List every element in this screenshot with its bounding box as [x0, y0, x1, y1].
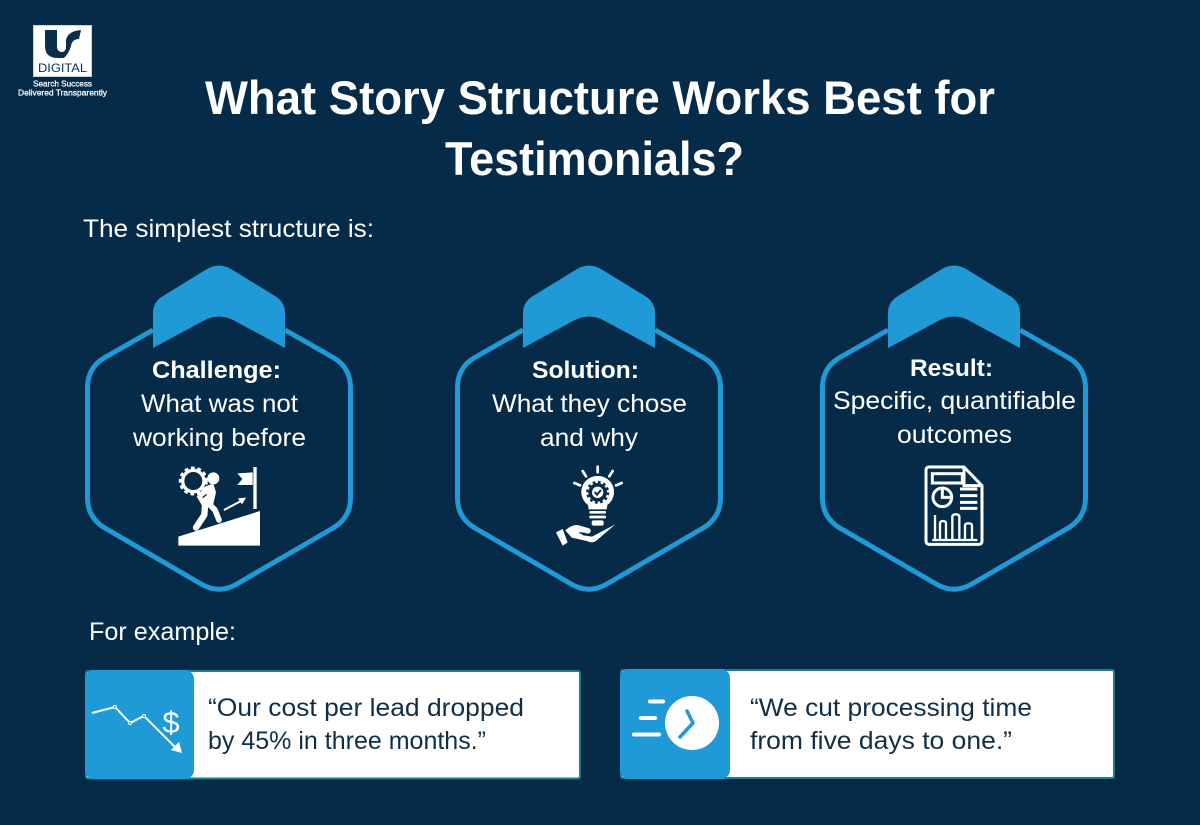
callout: cost per lead — [85, 670, 580, 779]
icon: report document — [926, 467, 982, 544]
example label: For example: — [89, 618, 236, 646]
quote: from five days to one.” — [750, 727, 1012, 755]
callout: processing time — [620, 669, 1114, 779]
title: What Story Structure Works Best for — [205, 71, 995, 124]
logo: DIGITAL — [38, 63, 88, 75]
description: What was not — [141, 390, 298, 418]
banner — [888, 266, 1020, 348]
icon: fast clock — [620, 669, 730, 779]
description: and why — [540, 424, 639, 452]
description: working before — [132, 424, 306, 452]
quote: “We cut processing time — [750, 694, 1032, 722]
title: Testimonials? — [445, 132, 744, 185]
panel: challenge — [88, 266, 350, 589]
panel: result — [822, 266, 1086, 589]
quote: “Our cost per lead dropped — [208, 694, 524, 722]
icon: climbing figure with gear and flag — [178, 467, 260, 546]
intro text: The simplest structure is: — [83, 215, 374, 243]
description — [492, 390, 687, 452]
icon: falling price: $ — [162, 705, 180, 740]
description — [132, 390, 306, 452]
description: outcomes — [897, 421, 1012, 449]
logo — [18, 26, 107, 98]
description: What they chose — [492, 390, 687, 418]
icon: light bulb on hand — [556, 467, 622, 546]
heading: Result: — [910, 355, 993, 382]
description: Specific, quantifiable — [833, 387, 1076, 415]
card — [86, 671, 580, 778]
heading: Challenge: — [152, 357, 281, 384]
panel: solution — [458, 266, 720, 589]
quote — [208, 694, 524, 755]
quote — [750, 694, 1032, 755]
hexagon outline — [88, 330, 350, 589]
card — [621, 670, 1114, 778]
icon: falling price — [85, 670, 194, 779]
heading: Solution: — [532, 357, 639, 384]
title — [205, 71, 995, 185]
banner — [523, 266, 655, 348]
description — [833, 387, 1076, 449]
hexagon outline — [822, 330, 1086, 589]
logo: Search Success — [33, 80, 92, 88]
logo: Delivered Transparently — [18, 88, 107, 98]
quote: by 45% in three months.” — [208, 727, 486, 755]
hexagon outline — [458, 330, 720, 589]
banner — [153, 266, 285, 348]
